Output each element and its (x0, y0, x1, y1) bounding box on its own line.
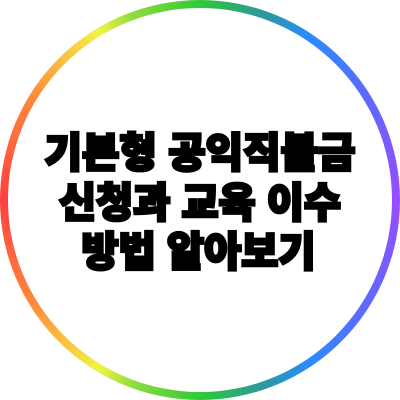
title line 1: 기본형 공익직불금 (44, 130, 356, 176)
title line 3: 방법 알아보기 (82, 229, 316, 275)
title line 2: 신청과 교육 이수 (59, 180, 341, 226)
